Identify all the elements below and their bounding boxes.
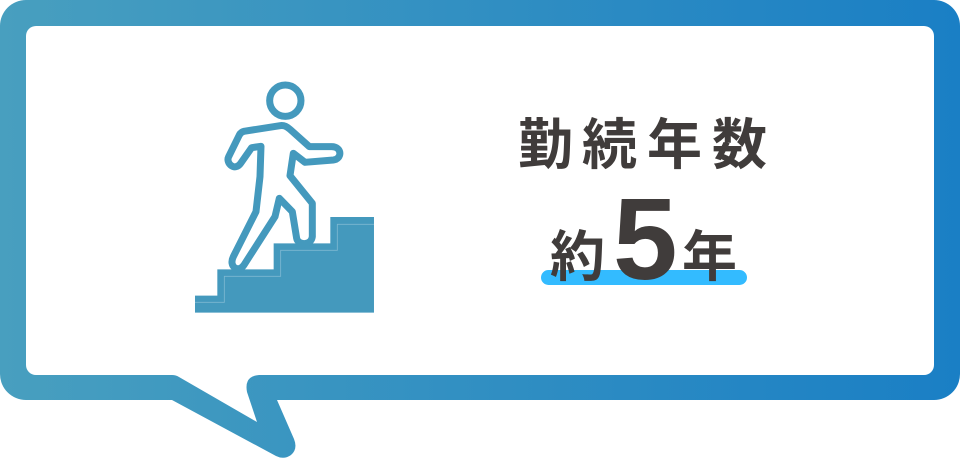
icon: person climbing stairs (195, 85, 374, 313)
icon: stairs (195, 217, 374, 313)
value: 約5年 (550, 174, 737, 304)
heading: 勤続年数: 数 (712, 114, 767, 176)
value: 約5年: 年 (682, 226, 737, 288)
value: 約5年: 5 (613, 174, 678, 304)
heading: 勤続年数: 勤 (518, 114, 573, 176)
heading: 勤続年数: 続 (582, 114, 637, 176)
highlight underline (541, 270, 747, 285)
heading: 勤続年数 (518, 114, 767, 176)
heading: 勤続年数: 年 (647, 114, 702, 176)
value: 約5年: 約 (550, 226, 605, 288)
icon: person (228, 85, 340, 269)
